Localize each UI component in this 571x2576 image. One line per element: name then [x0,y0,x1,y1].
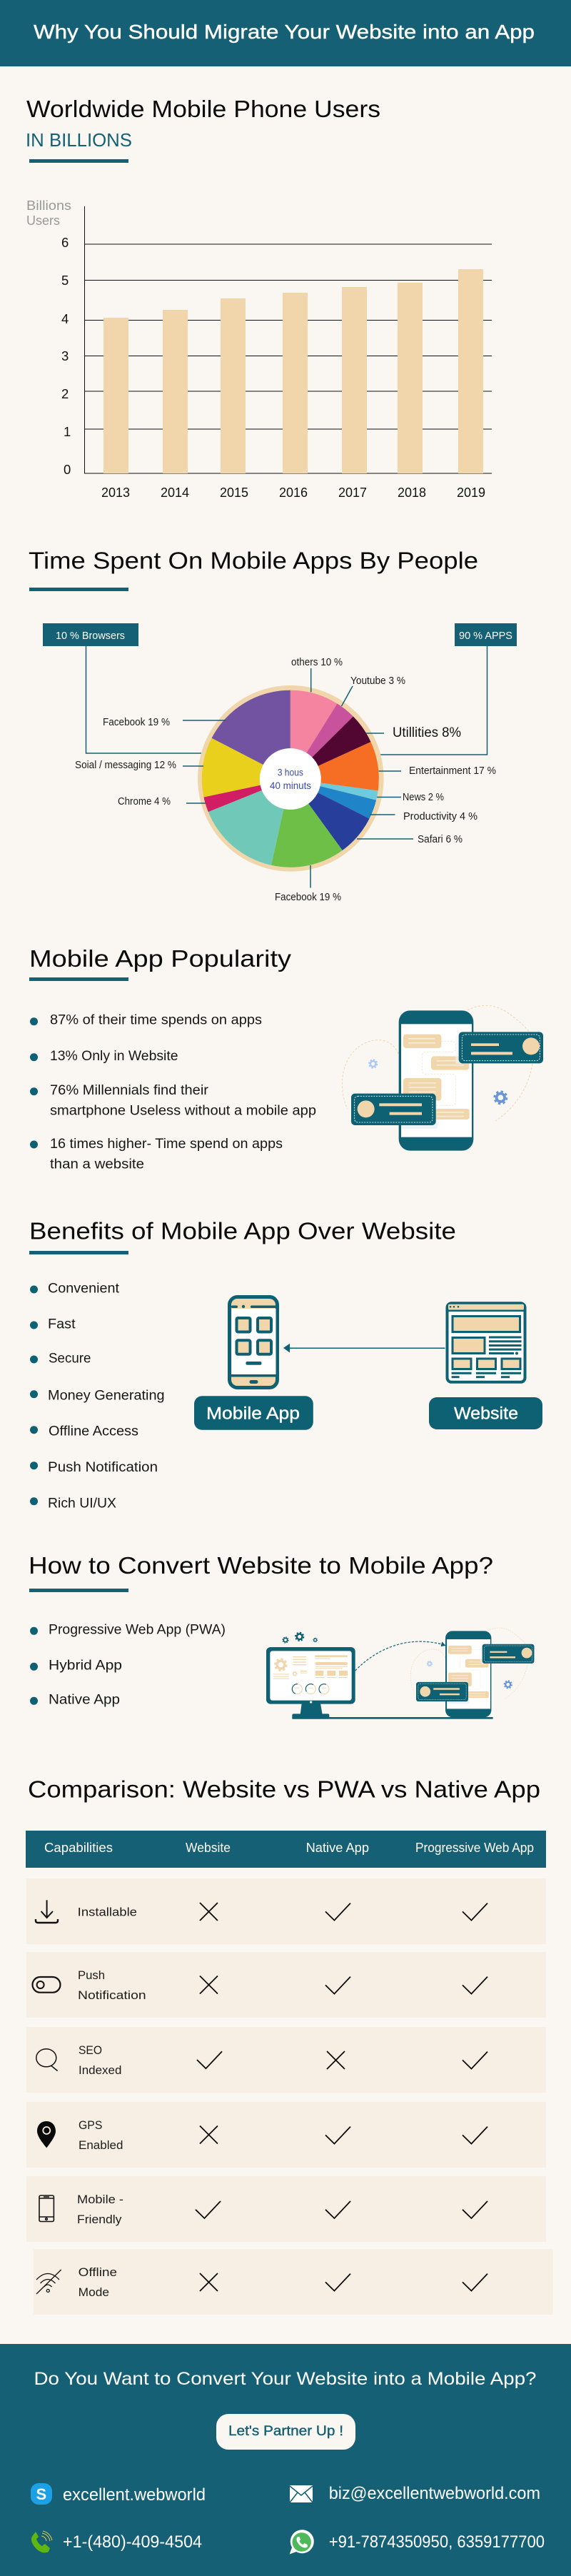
row: mobile friendly: Mobile - [77,2193,123,2206]
benefits list: Rich UI/UX [48,1496,116,1511]
row: push notification [26,1952,546,2018]
panel: how to convert website to mobile app [29,1552,534,1719]
table header: Capabilities [44,1841,113,1855]
icon: wifi off [36,2270,61,2294]
bar chart: 6 [61,235,69,250]
icon: toggle [33,1977,60,1993]
benefits list: Convenient [48,1282,120,1297]
cta heading: Do You Want to Convert Your Website into a Mobile App? [34,2369,536,2389]
icon: green phone [31,2531,52,2552]
bar chart: 4 [61,311,69,326]
pie chart [198,685,384,872]
arrow: website to mobile app [283,1344,445,1352]
pie labels and leader lines [75,657,496,903]
bullet list: 76% Millennials find their [50,1083,209,1098]
bullet list: 16 times higher- Time spend on apps [50,1137,283,1152]
heading: Comparison: Website vs PWA vs Native App [28,1776,540,1802]
pie labels and leader lines: Safari 6 % [418,834,463,845]
panel: comparison table [26,1776,553,2315]
bullet list: than a website [50,1157,144,1172]
icon: website [447,1303,525,1382]
pie centre label: 3 hous [278,767,303,778]
bar chart: 1 [64,424,71,439]
icon: skype: S [36,2485,46,2503]
row: gps enabled: GPS [79,2118,102,2132]
bullet list [30,1013,316,1172]
table header: Native App [306,1841,369,1855]
icon: whatsapp [290,2530,314,2555]
pie labels and leader lines: Facebook 19 % [275,892,341,903]
pie labels and leader lines: Utillities 8% [393,725,461,740]
bar chart: 2019 [457,485,485,500]
table header: Website [186,1841,231,1855]
pie centre label: 40 minuts [270,780,311,791]
icon: mobile app [230,1297,277,1388]
contact: whatsapp: +91-7874350950, 6359177700 [329,2532,545,2552]
row: offline mode: Offline [79,2265,117,2279]
pie labels and leader lines: Youtube 3 % [350,675,405,687]
icon: skype [31,2483,52,2505]
row: mobile friendly: Friendly [77,2213,122,2226]
row: seo indexed: Indexed [79,2063,121,2077]
button: mobile app [194,1396,313,1430]
panel: worldwide mobile phone users [26,96,492,500]
icon: magnifier [36,2049,58,2071]
callout: apps: 90 % APPS [459,630,512,642]
bar chart [26,198,492,500]
conversion options list: Native App [49,1693,120,1708]
heading: Worldwide Mobile Phone Users [26,96,380,122]
bar chart: 2016 [279,485,308,500]
icon: download [36,1900,58,1923]
pie labels and leader lines: Chrome 4 % [118,796,171,807]
row: gps enabled [26,2102,546,2168]
main title: Why You Should Migrate Your Website into an App [34,21,535,43]
heading: Mobile App Popularity [29,945,292,972]
icon: location pin [37,2121,56,2148]
row: offline mode: Mode [79,2285,109,2299]
bar chart: Billions [26,198,71,213]
row: seo indexed [26,2027,546,2093]
illustration: phone with chat cards [342,1005,543,1151]
pie labels and leader lines: Facebook 19 % [103,717,170,728]
panel: footer call to action [0,2344,571,2576]
table header: Progressive Web App [415,1841,534,1855]
pie labels and leader lines: others 10 % [291,657,343,668]
pie centre label [270,767,311,791]
conversion options list: Hybrid App [49,1658,122,1673]
button: mobile app: Mobile App [206,1404,300,1424]
header banner [0,0,571,66]
pie labels and leader lines: Entertainment 17 % [409,765,496,777]
subheading: IN BILLIONS [26,129,132,151]
callout: browsers [43,623,138,646]
benefits list: Offline Access [49,1424,138,1439]
conversion options list [30,1622,226,1708]
heading: Time Spent On Mobile Apps By People [29,547,478,574]
callout: browsers: 10 % Browsers [56,630,125,642]
bar chart: Users [26,213,60,228]
callout: apps [455,623,517,646]
panel: mobile app popularity [29,945,543,1172]
bar chart: 5 [61,273,69,288]
conversion options list: Progressive Web App (PWA) [49,1622,226,1637]
pie labels and leader lines: News 2 % [403,792,444,803]
button: let's partner up [216,2414,355,2450]
pie labels and leader lines: Productivity 4 % [403,811,477,822]
bar chart: 2015 [220,485,248,500]
row: push notification: Notification [78,1988,146,2002]
row: push notification: Push [78,1968,105,1982]
bullet list: smartphone Useless without a mobile app [50,1104,316,1119]
button: website: Website [454,1404,518,1424]
bar chart: 2 [61,386,69,401]
button: let's partner up: Let's Partner Up ! [228,2424,343,2439]
row: installable: Installable [78,1905,137,1919]
button: website [429,1397,542,1429]
contact: email: biz@excellentwebworld.com [329,2484,540,2503]
row: installable [26,1878,546,1944]
bar chart: 2013 [101,485,130,500]
benefits list: Secure [49,1352,91,1367]
benefits list: Push Notification [48,1460,158,1475]
panel: time spent on mobile apps [29,547,517,903]
icon: phone outline [39,2195,54,2222]
pie labels and leader lines: Soial / messaging 12 % [75,760,176,771]
benefits list: Money Generating [48,1389,165,1404]
row: mobile friendly [26,2176,546,2242]
contact: whatsapp [290,2530,545,2555]
bullet list: 87% of their time spends on apps [50,1013,262,1028]
bar chart: 3 [61,348,69,363]
row: offline mode [34,2249,553,2315]
bar chart: 2014 [161,485,189,500]
row: gps enabled: Enabled [79,2138,123,2152]
table header [26,1831,546,1868]
panel: benefits of mobile app over website [29,1218,542,1511]
benefits list [30,1282,165,1511]
heading: Benefits of Mobile App Over Website [29,1218,456,1244]
bar chart: 0 [64,462,71,477]
bullet list: 13% Only in Website [50,1049,178,1064]
contact: phone: +1-(480)-409-4504 [63,2532,202,2552]
row: seo indexed: SEO [79,2043,102,2057]
contact: skype: excellent.webworld [63,2485,206,2505]
icon: envelope [290,2485,313,2502]
benefits list: Fast [48,1317,76,1332]
heading: How to Convert Website to Mobile App? [29,1552,493,1579]
bar chart: 2017 [338,485,367,500]
bar chart: 2018 [398,485,426,500]
illustration: monitor converting to phone [266,1628,534,1719]
